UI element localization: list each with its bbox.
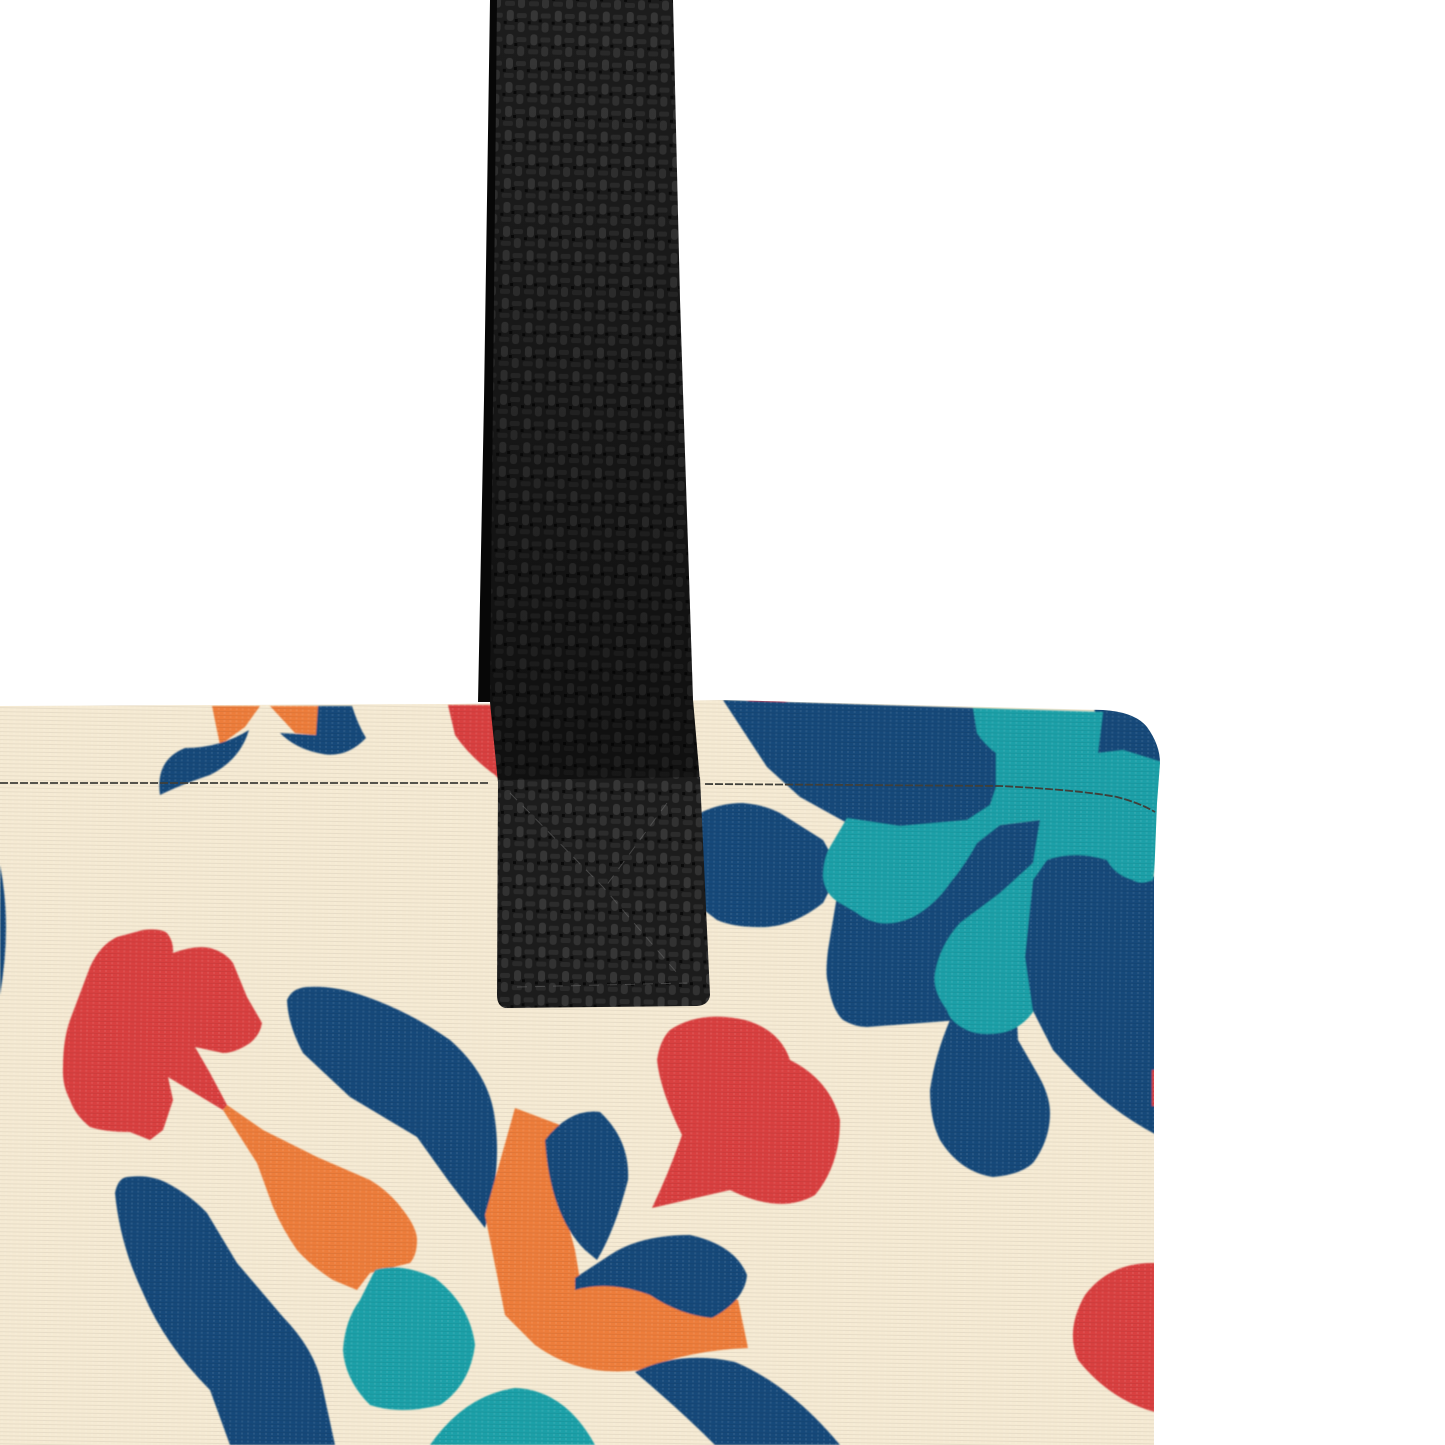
red sliver on the top edge [745,700,789,704]
navy leaf, bottom-centre [635,1358,840,1445]
strap end stitching [510,793,687,987]
bag body [0,695,1170,1445]
canvas weave overlay [0,695,1170,1445]
red sliver, right edge [1150,1068,1154,1108]
orange and navy centre motif [485,1108,748,1372]
teal flower, bottom-centre [343,1267,595,1445]
strap shading [490,0,700,782]
top-right navy and teal motif [700,700,1170,1177]
floral pattern [0,695,1170,1445]
red flower, centre-right [652,1017,840,1208]
strap upper section [490,0,700,782]
red shape by the strap [448,705,500,780]
stitching line [0,783,1155,812]
red blob, right edge [1073,1263,1155,1412]
navy wavy leaf, bottom-left [115,1176,335,1445]
red and orange flower, left [63,929,417,1290]
top-left orange and navy motif [159,706,366,795]
black strap [478,0,710,1008]
left-edge navy arc [0,865,6,995]
strap rear dark edge [478,0,500,702]
strap stitched end [497,777,710,1008]
navy leaf, centre-left [287,987,497,1228]
